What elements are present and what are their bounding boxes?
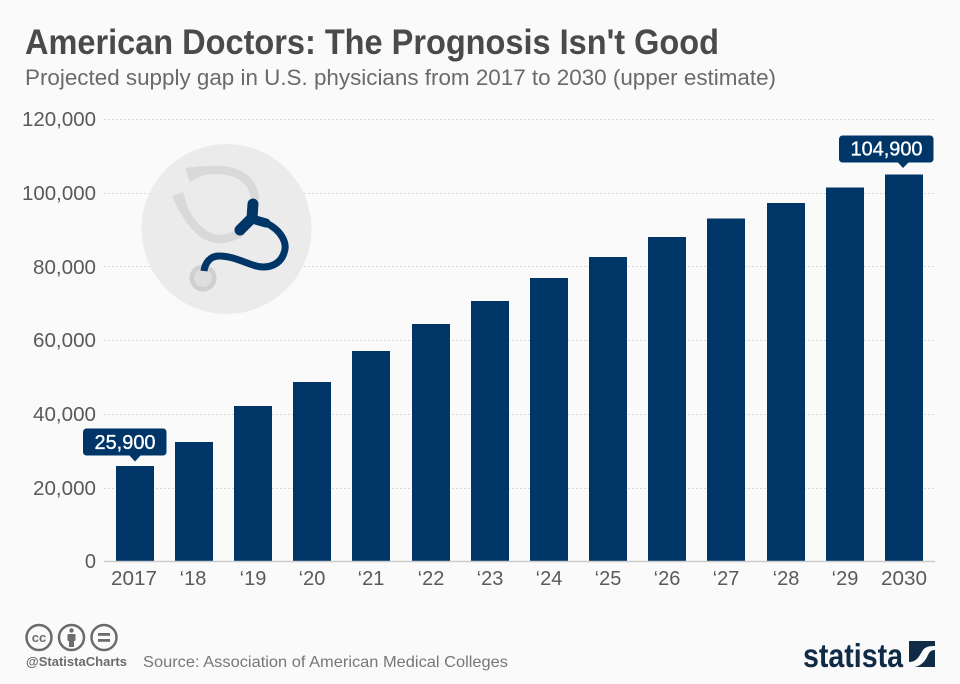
y axis labels: 80,000	[33, 257, 96, 279]
icon: stethoscope in circle	[142, 144, 312, 314]
icon: statista mark	[909, 641, 935, 667]
source: Source: Association of American Medical Colleges	[143, 654, 508, 671]
x axis labels: ‘26	[654, 568, 680, 590]
bar chart	[116, 174, 923, 561]
x axis labels: 2030	[881, 568, 927, 590]
y axis labels	[22, 109, 96, 573]
callout: 2030 value: 104,900	[850, 138, 922, 160]
x axis labels: ‘18	[180, 568, 206, 590]
x axis labels: ‘21	[358, 568, 384, 590]
x axis labels: ‘22	[418, 568, 444, 590]
y axis labels: 20,000	[33, 478, 96, 500]
y axis labels: 60,000	[33, 330, 96, 352]
social handle: @StatistaCharts	[26, 654, 127, 669]
icon: creative commons licence: cc	[32, 630, 46, 645]
icon: creative commons licence	[26, 625, 116, 650]
x axis labels	[111, 568, 927, 590]
y axis labels: 100,000	[22, 183, 96, 205]
subtitle: Projected supply gap in U.S. physicians from 2017 to 2030 (upper estimate)	[25, 65, 776, 90]
x axis labels: ‘19	[240, 568, 266, 590]
x axis labels: 2017	[111, 568, 157, 590]
x axis labels: ‘29	[832, 568, 858, 590]
title: American Doctors: The Prognosis Isn't Good	[25, 23, 719, 62]
x axis labels: ‘23	[477, 568, 503, 590]
x axis labels: ‘25	[595, 568, 621, 590]
statista logo: statista	[803, 637, 904, 674]
callout: 2017 value	[83, 428, 166, 462]
y axis labels: 40,000	[33, 404, 96, 426]
x axis labels: ‘24	[536, 568, 562, 590]
callout: 2017 value: 25,900	[94, 432, 156, 454]
y axis labels: 120,000	[22, 109, 96, 131]
x axis labels: ‘27	[713, 568, 739, 590]
y axis labels: 0	[85, 551, 96, 573]
x axis labels: ‘28	[773, 568, 799, 590]
x axis labels: ‘20	[299, 568, 325, 590]
callout: 2030 value	[839, 136, 934, 168]
